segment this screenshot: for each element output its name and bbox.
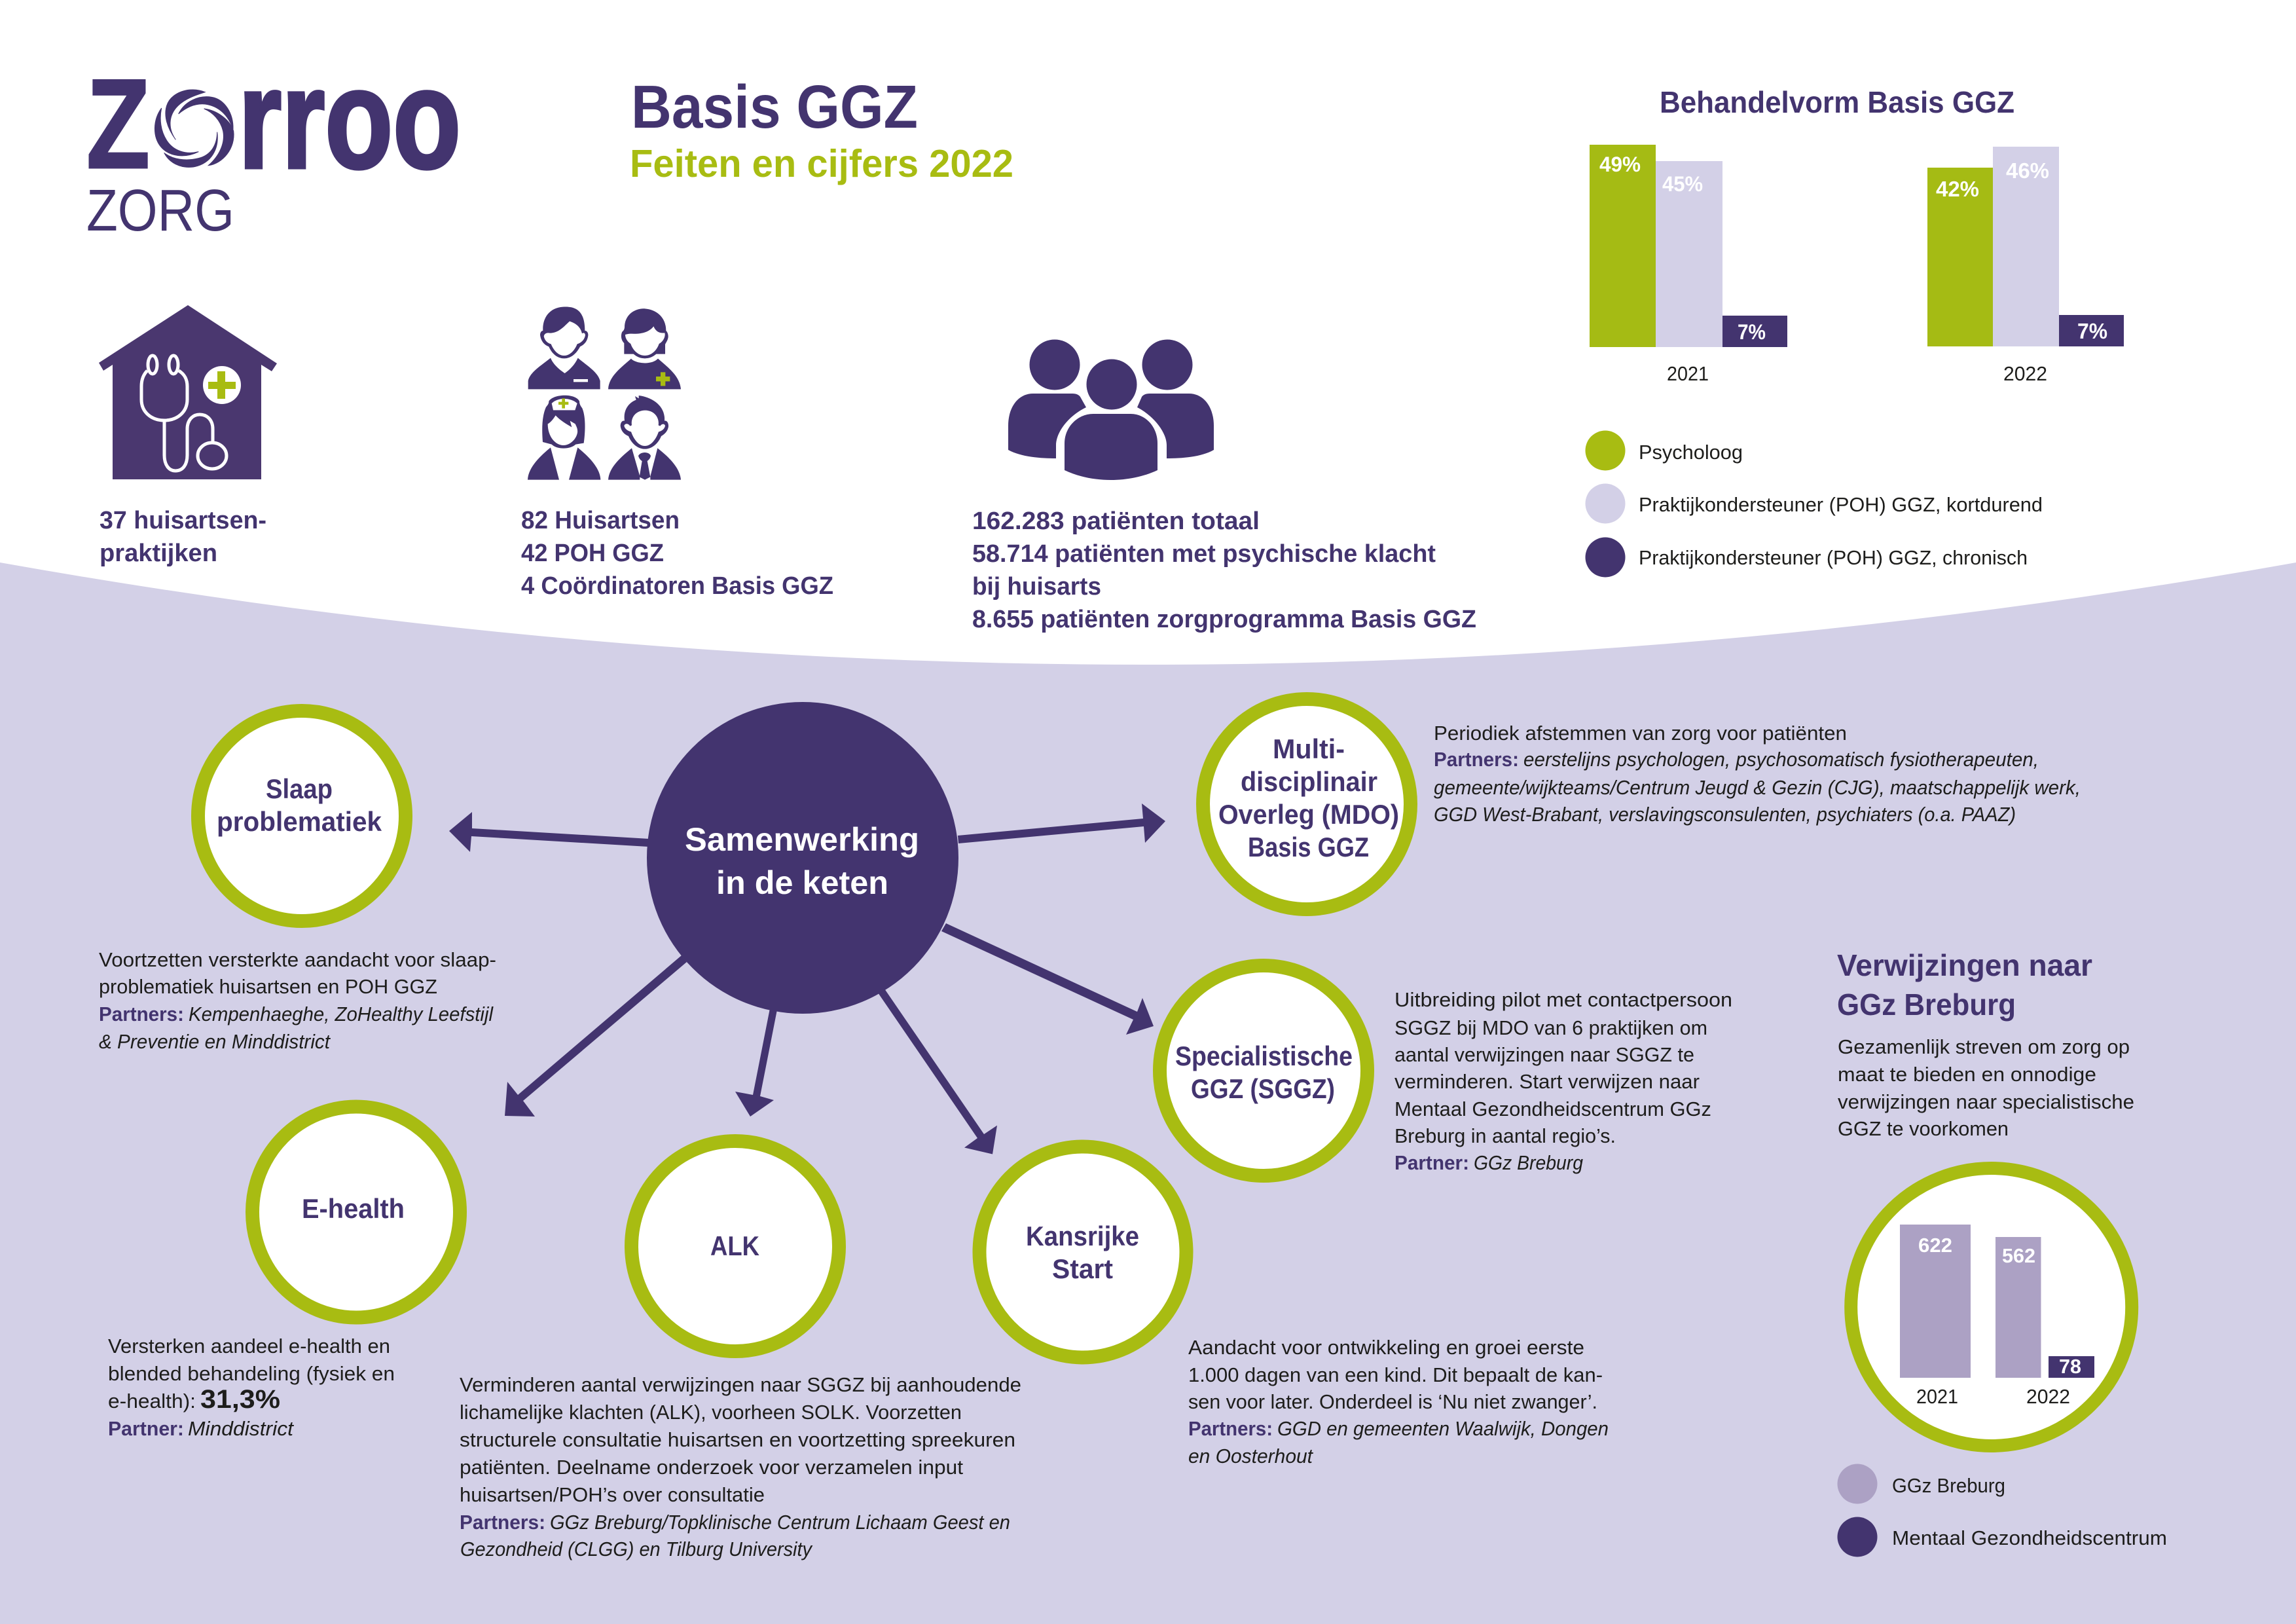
body text: Partners:	[1434, 748, 1519, 771]
text: patient numbers	[972, 507, 1476, 633]
body text: structurele consultatie huisartsen en voortzetting spreekuren	[460, 1428, 1015, 1451]
circle with heading	[198, 711, 406, 921]
bars 2021: 7%	[1738, 320, 1766, 344]
person: nurse	[528, 396, 600, 480]
heading	[1837, 948, 2092, 1022]
body text: Uitbreiding pilot met contactpersoon	[1394, 988, 1732, 1011]
text: huisartsenpraktijken: praktijken	[100, 540, 217, 567]
panel: Verwijzingen naar GGz Breburg	[1837, 948, 2167, 1557]
text: patient numbers: bij huisarts	[972, 573, 1101, 600]
body text: Partners:	[99, 1003, 184, 1025]
centre circle: Samenwerking in de keten	[647, 702, 958, 1014]
body text: huisartsen/POH’s over consultatie	[460, 1483, 765, 1506]
body text: problematiek huisartsen en POH GGZ	[99, 975, 437, 998]
circle with heading: Specialistische	[1175, 1041, 1353, 1071]
bars 2022	[1927, 147, 2124, 346]
text: patient numbers: 162.283 patiënten totaal	[972, 507, 1260, 535]
bars 2021: 49%	[1599, 153, 1641, 176]
body text: Voortzetten versterkte aandacht voor slaap-	[99, 948, 496, 971]
legend	[1586, 431, 2043, 578]
circle with heading	[631, 1141, 839, 1352]
body text: Aandacht voor ontwikkeling en groei eerste	[1188, 1336, 1584, 1359]
arrows from centre	[449, 803, 1165, 1154]
body text: GGD en gemeenten Waalwijk, Dongen	[1277, 1417, 1609, 1440]
body text: Partners:	[1188, 1417, 1273, 1440]
circle with heading: Kansrijke	[1026, 1221, 1139, 1251]
legend: Praktijkondersteuner (POH) GGZ, chronisch	[1639, 546, 2028, 569]
body text: maat te bieden en onnodige	[1838, 1063, 2096, 1086]
logo: Zorroo Zorg: Z	[86, 53, 150, 195]
background: lavender curved panel	[0, 563, 2296, 1624]
circle with heading: Multi-	[1273, 733, 1345, 764]
circle with heading: problematiek	[217, 806, 382, 837]
body text: 31,3%	[200, 1385, 280, 1414]
logo: Zorroo Zorg: rroo	[238, 39, 461, 198]
circle with heading: Overleg (MDO)	[1218, 799, 1399, 830]
text: staff numbers: 82 Huisartsen	[521, 507, 680, 534]
icon: group of patients	[1008, 339, 1214, 480]
panel: ALK	[460, 1141, 1021, 1560]
logo: Zorroo Zorg: ZORG	[86, 178, 234, 244]
body text: GGD West-Brabant, verslavingsconsulenten, psychiaters (o.a. PAAZ)	[1434, 803, 2016, 826]
circle with heading: GGZ (SGGZ)	[1191, 1073, 1335, 1104]
legend: Praktijkondersteuner (POH) GGZ, kortdurend	[1639, 493, 2043, 516]
arrow: to ALK	[735, 1008, 777, 1116]
body text: GGZ te voorkomen	[1838, 1117, 2009, 1140]
text: patient numbers: 58.714 patiënten met psychische klacht	[972, 540, 1436, 568]
circle with heading: disciplinair	[1241, 766, 1377, 797]
circle with heading	[979, 1147, 1186, 1357]
text: huisartsenpraktijken: 37 huisartsen-	[100, 507, 266, 534]
body text: Kempenhaeghe, ZoHealthy Leefstijl	[189, 1003, 494, 1025]
legend	[1837, 1464, 2167, 1557]
text: patient numbers: 8.655 patiënten zorgprogramma Basis GGZ	[972, 606, 1476, 633]
body text: Partners:	[460, 1511, 545, 1534]
circle with heading: ALK	[710, 1230, 759, 1261]
panel: Kansrijke Start	[979, 1147, 1609, 1467]
circle with bar chart: 562	[2002, 1244, 2035, 1267]
body text: GGz Breburg	[1474, 1151, 1583, 1174]
circle with heading	[1160, 965, 1367, 1176]
person: male doctor	[528, 307, 600, 389]
body text: eerstelijns psychologen, psychosomatisch fysiotherapeuten,	[1523, 748, 2039, 771]
circle with heading: E-health	[302, 1193, 405, 1224]
body text: Gezamenlijk streven om zorg op	[1838, 1035, 2130, 1058]
arrow: to Slaap	[449, 812, 649, 852]
legend: Psycholoog	[1639, 441, 1743, 464]
body text	[1838, 1035, 2134, 1140]
body text	[1188, 1336, 1609, 1467]
body text: SGGZ bij MDO van 6 praktijken om	[1394, 1016, 1707, 1039]
body text: 1.000 dagen van een kind. Dit bepaalt de kan-	[1188, 1363, 1603, 1386]
title: Basis GGZ	[631, 73, 918, 141]
legend: GGz Breburg	[1892, 1474, 2005, 1497]
body text: Breburg in aantal regio’s.	[1394, 1124, 1616, 1147]
panel: Specialistische GGZ	[1160, 965, 1732, 1176]
body text: aantal verwijzingen naar SGGZ te	[1394, 1043, 1694, 1066]
bars 2021: 45%	[1662, 172, 1703, 196]
bars 2022: 42%	[1936, 177, 1979, 201]
heading: GGz Breburg	[1837, 987, 2016, 1022]
icon: house with stethoscope	[99, 305, 277, 479]
body text: e-health):	[108, 1390, 196, 1412]
body text: Minddistrict	[188, 1417, 294, 1440]
logo: Zorroo Zorg	[86, 39, 461, 244]
body text: Mentaal Gezondheidscentrum GGz	[1394, 1098, 1711, 1120]
heading: Verwijzingen naar	[1837, 948, 2092, 982]
axis label 2022: 2022	[2003, 362, 2047, 385]
text: staff numbers: 42 POH GGZ	[521, 540, 664, 567]
circle with heading: Basis GGZ	[1248, 832, 1369, 862]
body text: sen voor later. Onderdeel is ‘Nu niet zwanger’.	[1188, 1390, 1597, 1413]
circle with heading: Slaap	[266, 773, 333, 804]
panel: E-health	[108, 1107, 460, 1440]
body text: Gezondheid (CLGG) en Tilburg University	[460, 1538, 813, 1560]
arrow: to MDO	[958, 803, 1165, 843]
circle with heading: Start	[1052, 1253, 1113, 1284]
body text: patiënten. Deelname onderzoek voor verzamelen input	[460, 1456, 963, 1479]
legend: Mentaal Gezondheidscentrum	[1892, 1526, 2167, 1549]
body text: Versterken aandeel e-health en	[108, 1335, 390, 1357]
circle with bar chart: 622	[1918, 1234, 1952, 1257]
body text	[460, 1373, 1021, 1560]
body text: Verminderen aantal verwijzingen naar SGGZ bij aanhoudende	[460, 1373, 1021, 1396]
body text: en Oosterhout	[1188, 1445, 1313, 1467]
axis label 2021: 2021	[1667, 362, 1709, 385]
body text	[99, 948, 496, 1053]
body text	[108, 1335, 395, 1440]
bars 2022: 7%	[2077, 319, 2107, 343]
body text: & Preventie en Minddistrict	[99, 1030, 331, 1053]
body text	[1434, 722, 2081, 826]
circle with heading	[253, 1107, 460, 1318]
body text: Partner:	[1394, 1151, 1469, 1174]
body text: Partner:	[108, 1417, 184, 1440]
panel: Multidisciplinair Overleg	[1203, 699, 2081, 909]
circle with bar chart: 2022	[2026, 1385, 2070, 1408]
circle with bar chart: 2021	[1916, 1385, 1958, 1408]
chart heading: Behandelvorm Basis GGZ	[1660, 85, 2014, 119]
body text: gemeente/wijkteams/Centrum Jeugd & Gezin (CJG), maatschappelijk werk,	[1434, 776, 2081, 799]
person: man in suit	[608, 396, 681, 480]
body text: verwijzingen naar specialistische	[1838, 1090, 2134, 1113]
body text: verminderen. Start verwijzen naar	[1394, 1070, 1700, 1093]
centre circle: Samenwerking in de keten: in de keten	[716, 864, 888, 901]
icon: four care professionals	[528, 307, 681, 480]
body text: blended behandeling (fysiek en	[108, 1362, 395, 1385]
subtitle: Feiten en cijfers 2022	[630, 142, 1013, 185]
text: staff numbers	[521, 507, 833, 600]
body text: GGz Breburg/Topklinische Centrum Lichaam Geest en	[550, 1511, 1010, 1534]
text: staff numbers: 4 Coördinatoren Basis GGZ	[521, 572, 833, 600]
arrow: to Kansrijke Start	[878, 989, 997, 1154]
bars 2022: 46%	[2006, 158, 2049, 183]
circle with bar chart	[1851, 1168, 2132, 1446]
body text: lichamelijke klachten (ALK), voorheen SOLK. Voorzetten	[460, 1401, 962, 1424]
text: huisartsenpraktijken	[100, 507, 266, 567]
circle with heading	[1203, 699, 1410, 909]
person: female doctor	[608, 308, 681, 389]
arrow: to SGGZ	[941, 923, 1154, 1035]
arrow: to E-health	[505, 955, 687, 1116]
body text: Periodiek afstemmen van zorg voor patiënten	[1434, 722, 1847, 745]
panel: bar chart Behandelvorm Basis GGZ	[1586, 85, 2124, 578]
circle with bar chart: 78	[2059, 1355, 2081, 1378]
bars 2021	[1590, 145, 1787, 347]
centre circle: Samenwerking in de keten: Samenwerking	[685, 821, 919, 858]
panel: Slaapproblematiek	[99, 711, 496, 1053]
body text	[1394, 988, 1732, 1174]
